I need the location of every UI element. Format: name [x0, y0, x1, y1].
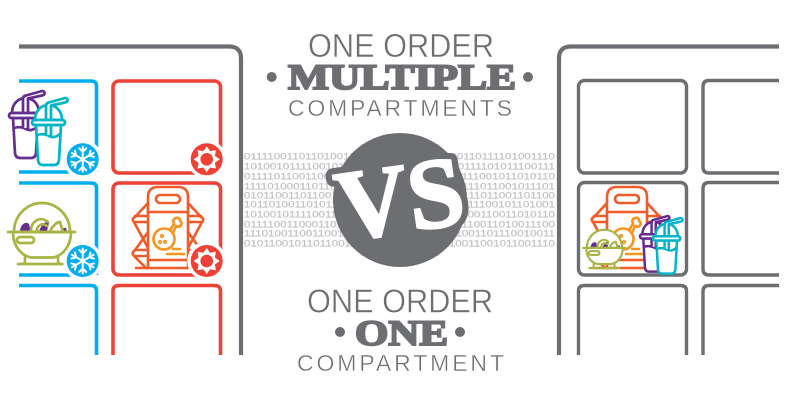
VS badge: VS — [329, 135, 471, 262]
binary pattern background: 01111001101101001011010011000101100110111101001110 — [244, 152, 555, 162]
heading: one order multiple compartments: MULTIPLE — [288, 57, 516, 97]
heading: one order one compartment: COMPARTMENT — [297, 350, 504, 376]
binary pattern background: 10110100110101110010111001101011001011100101101001 — [244, 200, 555, 210]
icon: heat badge lower — [187, 242, 226, 280]
heading: one order multiple compartments: COMPARTMENTS — [288, 95, 512, 121]
icon: heat badge — [187, 140, 226, 179]
binary pattern background: 11110100011011010100110111001011000111011001011101 — [244, 182, 555, 192]
heading: one order multiple compartments: ONE ORDER — [308, 27, 494, 64]
icon group: order in one compartment — [583, 187, 682, 274]
binary pattern background: 10100101111001010011011101001011000111101011100111 — [244, 162, 555, 172]
binary pattern background: 10100101111001101100110011100100110100110011010110 — [244, 210, 555, 220]
heading: one order multiple compartments — [267, 27, 533, 121]
gray compartments — [578, 80, 779, 355]
left outer frame — [19, 46, 241, 355]
VS badge: VS — [329, 135, 471, 262]
binary pattern background: 01011001101100110101001100111010010111011001101100 — [244, 190, 555, 200]
red hot compartments — [113, 81, 220, 355]
binary pattern background — [244, 152, 555, 248]
icon: takeout box — [133, 187, 203, 268]
binary pattern background: 01111001100011011001110101001100101110011010011100 — [244, 220, 555, 230]
icon: snowflake badge — [63, 140, 102, 179]
icon: snowflake badge lower — [63, 242, 102, 280]
heading: one order one compartment: ONE ORDER — [307, 282, 493, 320]
binary pattern background: 01011001011011001110110011011010110011001011001110 — [244, 238, 555, 248]
heading: one order one compartment: ONE — [355, 313, 448, 353]
binary pattern background: 01111011001100110010011101001100110111001011010110 — [244, 172, 555, 182]
icon: salad bowl — [8, 203, 75, 264]
right outer frame — [559, 46, 779, 355]
right panel: single-compartment locker — [559, 46, 779, 355]
binary pattern background: 11101001100110010110110100111001011001101110010011 — [244, 228, 555, 238]
icon: drinks — [9, 91, 68, 165]
left panel: multi-compartment locker — [8, 46, 241, 355]
blue cold compartments — [19, 81, 96, 355]
heading: one order one compartment — [297, 282, 504, 376]
